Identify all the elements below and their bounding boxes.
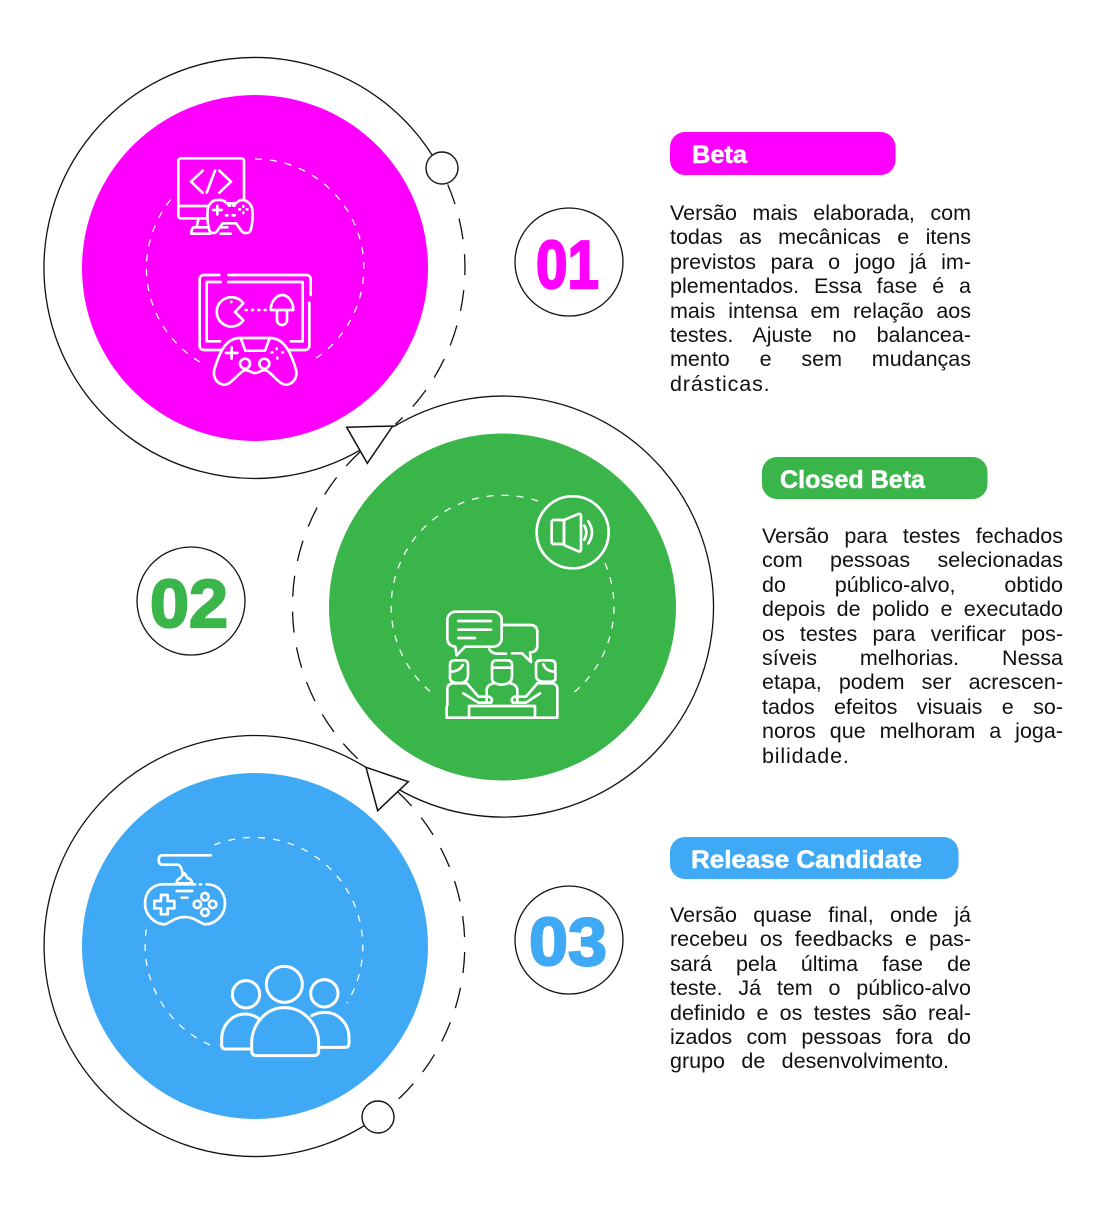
circle: closed beta bbox=[329, 434, 676, 780]
number badge: 02 bbox=[137, 547, 245, 655]
text block: closed beta description: síveis melhorias. Nessa bbox=[762, 646, 1063, 670]
inner dashed orbit: closed beta bbox=[391, 495, 614, 697]
arrow: closed beta to release candidate bbox=[366, 767, 408, 811]
text block: beta description: previstos para o jogo já im- bbox=[670, 250, 971, 274]
text block: beta description bbox=[670, 201, 971, 396]
text block: release candidate description: grupo de desenvolvimento. bbox=[670, 1049, 949, 1073]
heading pill: Closed Beta bbox=[762, 457, 988, 499]
text block: release candidate description: izados com pessoas fora do bbox=[670, 1025, 971, 1049]
text block: beta description: plementados. Essa fase é a bbox=[670, 274, 971, 298]
text block: release candidate description: Versão quase final, onde já bbox=[670, 903, 971, 927]
arrow: beta to closed beta bbox=[347, 426, 393, 463]
icon: wired gamepad bbox=[145, 855, 225, 924]
text block: beta description: testes. Ajuste no balancea- bbox=[670, 323, 971, 347]
text block: closed beta description: do público-alvo, obtido bbox=[762, 573, 1063, 597]
orbit: beta ring bbox=[44, 57, 465, 478]
text block: closed beta description: tados efeitos visuais e so- bbox=[762, 695, 1063, 719]
heading pill: Release Candidate: Release Candidate bbox=[691, 846, 922, 874]
text block: release candidate description bbox=[670, 903, 971, 1073]
circle: release candidate bbox=[82, 773, 428, 1119]
text block: closed beta description: os testes para verificar pos- bbox=[762, 622, 1063, 646]
text block: release candidate description: recebeu os feedbacks e pas- bbox=[670, 927, 971, 951]
icon: arcade screen with gamepad bbox=[200, 275, 311, 385]
heading pill: Beta bbox=[670, 132, 896, 175]
inner dashed orbit: beta bbox=[146, 159, 364, 362]
text block: beta description: mento e sem mudanças bbox=[670, 347, 971, 371]
text block: release candidate description: teste. Já tem o público-alvo bbox=[670, 976, 971, 1000]
text block: closed beta description: etapa, podem ser acrescen- bbox=[762, 670, 1063, 694]
orbit: release candidate ring bbox=[44, 736, 465, 1157]
text block: beta description: Versão mais elaborada, com bbox=[670, 201, 971, 225]
heading pill: Closed Beta: Closed Beta bbox=[780, 466, 926, 494]
number badge: 03: 03 bbox=[529, 904, 607, 980]
number badge: 03 bbox=[515, 886, 623, 994]
heading pill: Beta: Beta bbox=[692, 141, 748, 169]
inner dashed orbit: release candidate bbox=[145, 837, 363, 1045]
text block: closed beta description: com pessoas selecionadas bbox=[762, 548, 1063, 572]
text block: release candidate description: sará pela última fase de bbox=[670, 952, 971, 976]
icon: team meeting with speech bubbles bbox=[447, 612, 557, 718]
text block: beta description: todas as mecânicas e itens bbox=[670, 225, 971, 249]
circle: beta bbox=[82, 95, 428, 441]
heading pill: Release Candidate bbox=[670, 837, 958, 879]
text block: closed beta description: depois de polido e executado bbox=[762, 597, 1063, 621]
text block: closed beta description: Versão para testes fechados bbox=[762, 524, 1063, 548]
text block: closed beta description: noros que melhoram a joga- bbox=[762, 719, 1063, 743]
text block: release candidate description: definido e os testes são real- bbox=[670, 1001, 971, 1025]
text block: closed beta description: bilidade. bbox=[762, 744, 850, 768]
end node: release candidate ring bbox=[362, 1101, 394, 1133]
icon: group of people bbox=[222, 966, 349, 1056]
text block: closed beta description bbox=[762, 524, 1063, 768]
number badge: 02: 02 bbox=[150, 566, 228, 642]
orbit: closed beta ring bbox=[292, 396, 714, 817]
number badge: 01: 01 bbox=[536, 227, 599, 303]
text block: beta description: mais intensa em relação aos bbox=[670, 299, 971, 323]
icon: monitor with code and gamepad bbox=[178, 158, 253, 234]
start node: beta ring bbox=[426, 152, 458, 184]
number badge: 01 bbox=[515, 208, 623, 316]
icon: speaker in circle bbox=[537, 496, 609, 568]
text block: beta description: drásticas. bbox=[670, 372, 771, 396]
